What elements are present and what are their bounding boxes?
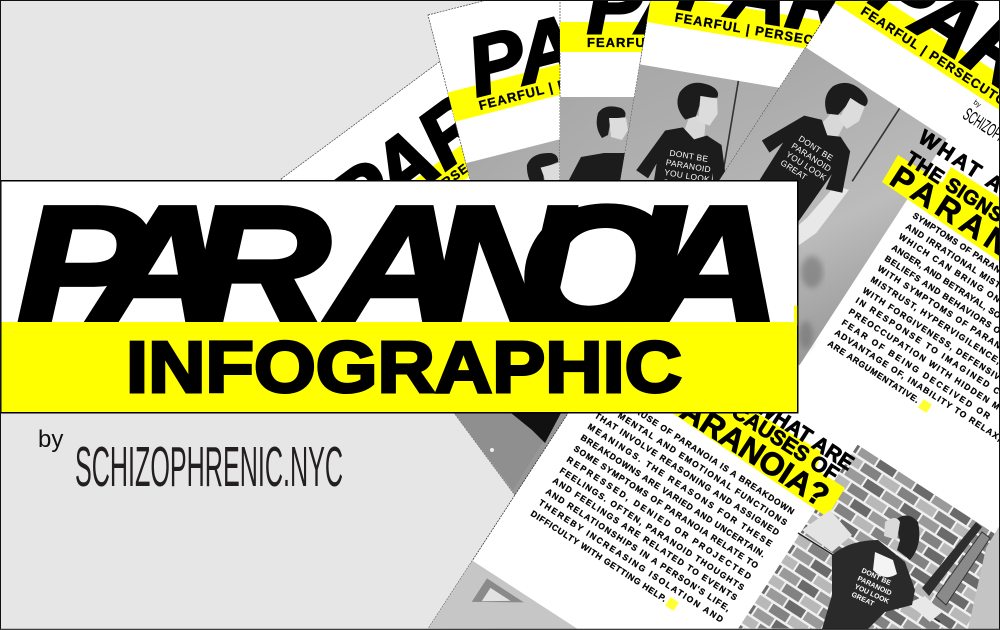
shirt text — [852, 568, 892, 606]
yellow end mark — [665, 597, 679, 611]
body text: signs of paranoia: ARE ARGUMENTATIVE. — [826, 338, 921, 405]
heading: what are the causes of paranoia: WHAT ARE — [752, 396, 858, 475]
neckline — [873, 552, 897, 577]
body text: signs of paranoia: PREOCCUPATION WITH HIDDEN M — [847, 306, 1000, 412]
banner title word: PARANOIA — [16, 171, 782, 363]
sheet 5: main full leaflet — [428, 0, 1000, 630]
text: SCHIZOPHRENIC.NYC — [75, 435, 343, 499]
body text: signs of paranoia: BELIEFS AND BEHAVIORS O — [883, 253, 1000, 336]
t-shirt text — [781, 136, 834, 181]
sheet 4: leaflet tilted right: FEARFUL | PERSECUTORY — [674, 10, 864, 56]
body text: causes of paranoia: OF MENTAL AND EMOTIONAL FUNCTIONS — [601, 400, 789, 528]
building photo — [428, 561, 578, 630]
by line — [963, 100, 999, 142]
body text: causes of paranoia: SOME SYMPTOMS OF PARANOIA RELATE TO — [572, 443, 760, 571]
body text: causes of paranoia: THEREBY INCREASING ISOLATION AND — [537, 497, 725, 624]
banner white panel — [1, 181, 798, 413]
window ledge and light stone — [798, 510, 942, 622]
t-shirt text — [664, 150, 710, 180]
body text: causes of paranoia: FEELINGS. OFTEN, PARANOID THOUGHTS — [558, 465, 746, 593]
t-shirt text: PARANOID — [790, 141, 833, 174]
sheet 3: upright leaflet: FEARFUL | PERSECUTORY — [587, 35, 778, 50]
body text: signs of paranoia: ADVANTAGE OF, INABILITY TO RELAX, — [833, 327, 1000, 443]
hair — [895, 515, 919, 560]
sheet 2: leaflet tilted left: FEARFUL | PERSECUTORY — [477, 51, 665, 113]
t-shirt text: YOU LOOK — [664, 167, 711, 185]
body text: signs of paranoia: WITH SYMPTOMS OF PARAN — [876, 263, 1000, 351]
body text: causes of paranoia — [530, 414, 795, 622]
street photo fragment with shoe — [454, 413, 561, 490]
body text: causes of paranoia: THAT INVOLVE REASONING AND ASSIGNED — [593, 410, 781, 537]
heading: what are the causes of paranoia: CAUSES OF — [728, 400, 843, 486]
byline — [38, 426, 343, 499]
yellow band — [2, 322, 797, 412]
heading: what are the causes of paranoia: ARANOIA? — [675, 392, 836, 514]
body text: causes of paranoia: THE CAUSE OF PARANOIA IS A BREAKDOWN — [608, 389, 796, 516]
yellow highlight — [672, 414, 845, 514]
sheet 1: leftmost rotated leaflet — [280, 62, 568, 496]
yellow end mark — [918, 399, 932, 413]
window grille — [922, 522, 990, 605]
brick wall photo — [738, 445, 1000, 630]
jacket and top — [822, 540, 915, 629]
face — [884, 518, 900, 540]
t-shirt text: GREAT — [662, 177, 693, 192]
banner subtitle: INFOGRAPHIC — [126, 328, 682, 408]
lower right brick return — [968, 525, 1000, 629]
body text: causes of paranoia: MEANINGS. THE REASONS FOR THESE — [586, 421, 774, 549]
t-shirt text: DONT BE — [669, 148, 709, 164]
sheet 3: upright leaflet — [560, 1, 650, 180]
body text: signs of paranoia: IN RESPONSE TO IMAGINED C — [854, 295, 1000, 396]
body text: causes of paranoia: AND FEELINGS ARE RELATED TO EVENTS — [551, 475, 739, 603]
body text: signs of paranoia: WITH FORGIVENESS, DEFENSIV — [861, 285, 1000, 382]
by line: by — [972, 99, 982, 110]
man photo on sheet 2 — [526, 153, 560, 180]
leaflet fan — [281, 0, 1000, 630]
shirt text: GREAT — [850, 591, 876, 608]
body text: signs of paranoia — [826, 210, 1000, 443]
sheet 2: leaflet tilted left — [428, 1, 560, 180]
shirt text: DONT BE — [860, 567, 892, 587]
t-shirt text: GREAT — [779, 157, 809, 182]
t-shirt text: PARANOID — [665, 157, 712, 175]
body text: signs of paranoia: WHICH CAN BRING ON — [897, 231, 1000, 304]
body text: signs of paranoia: FEAR OF BEING DECEIVED OR — [840, 317, 993, 421]
shirt text: YOU LOOK — [853, 583, 890, 606]
title banner — [1, 171, 798, 413]
body text: causes of paranoia: DIFFICULTY WITH GETTING HELP. — [529, 508, 669, 604]
yellow corner step — [794, 306, 797, 326]
body text: causes of paranoia: BREAKDOWNS ARE VARIED AND UNCERTAIN. — [579, 432, 767, 559]
body text: causes of paranoia: REPRESSED, DENIED OR PROJECTED — [565, 454, 753, 581]
t-shirt text: DONT BE — [797, 133, 835, 163]
body text: signs of paranoia: SYMPTOMS OF PARAN — [911, 210, 1000, 275]
yellow highlight — [882, 155, 1000, 262]
man photo on sheet 5 — [760, 82, 868, 246]
wall stains — [799, 256, 823, 349]
body text: signs of paranoia: ANGER, AND BETRAYAL, SO — [890, 242, 1000, 321]
body text: causes of paranoia: AND RELATIONSHIPS IN A PERSON'S LIFE, — [544, 486, 732, 613]
body text: signs of paranoia: MISTRUST, HYPERVIGILENCE, — [869, 274, 1000, 366]
man photo on sheet 3 — [569, 106, 628, 180]
sheet 1: leftmost rotated leaflet: FEARFUL | PERSECUTORY — [358, 124, 520, 250]
man photo on sheet 4 — [636, 82, 725, 180]
t-shirt text: YOU LOOK — [784, 149, 828, 183]
sheet 4: leaflet tilted right — [620, 1, 822, 180]
byline: by — [38, 426, 63, 453]
woman photo — [822, 515, 919, 629]
shirt text: PARANOID — [856, 575, 892, 597]
wall photo — [720, 48, 946, 366]
body text: signs of paranoia: AND IRRATIONAL MIST — [904, 221, 1000, 291]
